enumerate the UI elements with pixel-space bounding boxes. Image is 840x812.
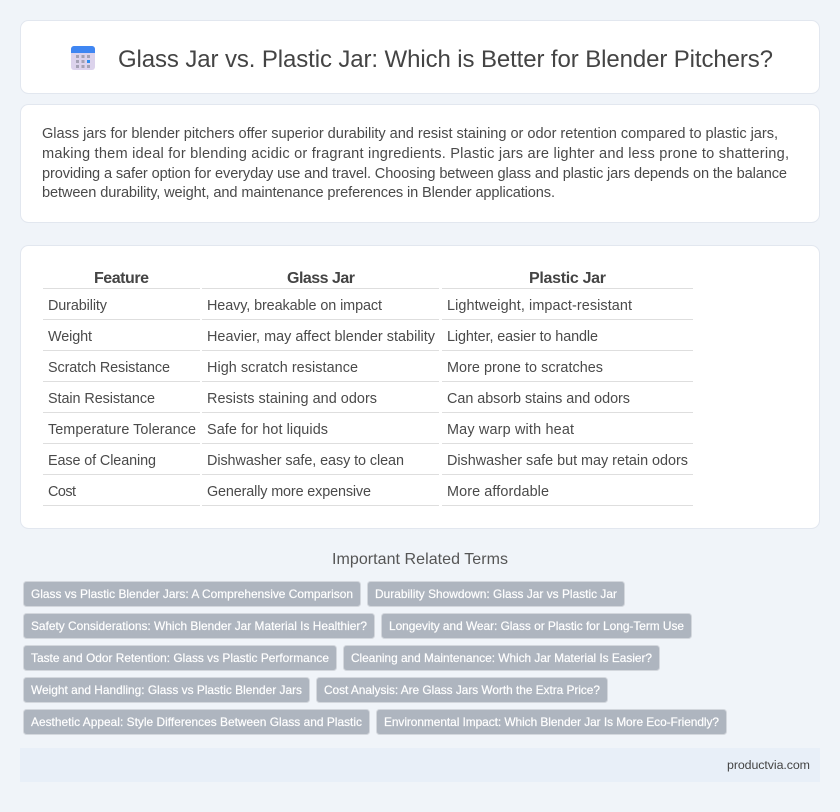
row: durability: Heavy, breakable on impact — [207, 298, 382, 314]
tag: Durability Showdown: Glass Jar vs Plastic Jar — [375, 587, 617, 601]
row: temperature tolerance: May warp with heat — [447, 422, 574, 438]
row: scratch resistance: High scratch resistance — [207, 360, 358, 376]
text block: summary: providing a safer option for everyday use and travel. Choosing between glass and plastic jars depends on the balance — [42, 166, 787, 182]
tag: Glass vs Plastic Blender Jars: A Comprehensive Comparison — [31, 587, 353, 601]
tag: Cost Analysis: Are Glass Jars Worth the Extra Price? — [324, 683, 600, 697]
table header: Plastic Jar — [529, 270, 606, 287]
tag — [376, 710, 726, 734]
row: ease of cleaning — [48, 453, 688, 469]
row: stain resistance: Resists staining and odors — [207, 391, 377, 407]
tag — [24, 646, 336, 670]
row: ease of cleaning: Dishwasher safe, easy to clean — [207, 453, 404, 469]
row: stain resistance: Can absorb stains and odors — [447, 391, 630, 407]
tag: Aesthetic Appeal: Style Differences Between Glass and Plastic — [31, 715, 362, 729]
row: durability — [48, 298, 632, 314]
row: durability: Durability — [48, 298, 108, 314]
row: cost: Generally more expensive — [207, 484, 371, 500]
footer — [20, 748, 820, 782]
row: cost: More affordable — [447, 484, 549, 500]
text block: summary: between durability, weight, and maintenance preferences in Blender applications. — [42, 185, 555, 201]
tag — [368, 582, 624, 606]
table header: Glass Jar — [287, 270, 355, 287]
text block: summary: Glass jars for blender pitchers offer superior durability and resist staining or odor retention compared to plastic jars, — [42, 126, 778, 142]
row: weight: Heavier, may affect blender stability — [207, 329, 436, 345]
tag — [316, 678, 608, 702]
tag: Environmental Impact: Which Blender Jar Is More Eco-Friendly? — [384, 715, 719, 729]
row: ease of cleaning: Dishwasher safe but may retain odors — [447, 453, 688, 469]
row: cost: Cost — [48, 484, 76, 500]
row: durability: Lightweight, impact-resistant — [447, 298, 632, 314]
tag — [382, 614, 692, 638]
title: Glass Jar vs. Plastic Jar: Which is Better for Blender Pitchers? — [118, 46, 773, 73]
row: temperature tolerance — [48, 422, 574, 438]
icon: calendar grid — [71, 46, 95, 70]
tag — [24, 678, 310, 702]
row: weight: Lighter, easier to handle — [447, 329, 598, 345]
tag: Longevity and Wear: Glass or Plastic for Long-Term Use — [389, 619, 684, 633]
row: temperature tolerance: Temperature Tolerance — [48, 422, 196, 438]
row: scratch resistance — [48, 360, 603, 376]
tag — [344, 646, 660, 670]
tag — [24, 710, 370, 734]
row: stain resistance: Stain Resistance — [48, 391, 155, 407]
table header — [94, 270, 606, 287]
row: weight: Weight — [48, 329, 92, 345]
row: scratch resistance: Scratch Resistance — [48, 360, 170, 376]
tag list: related terms — [24, 582, 726, 734]
tag: Taste and Odor Retention: Glass vs Plastic Performance — [31, 651, 329, 665]
footer source: productvia.com — [727, 758, 810, 772]
tag — [24, 582, 360, 606]
row: temperature tolerance: Safe for hot liquids — [207, 422, 328, 438]
row: stain resistance — [48, 391, 630, 407]
panel: comparison table — [20, 246, 820, 528]
row: scratch resistance: More prone to scratches — [447, 360, 603, 376]
tag: Safety Considerations: Which Blender Jar Material Is Healthier? — [31, 619, 367, 633]
tag: Weight and Handling: Glass vs Plastic Blender Jars — [31, 683, 302, 697]
row: weight — [48, 329, 598, 345]
row: cost — [48, 484, 549, 500]
text block: summary: making them ideal for blending acidic or fragrant ingredients. Plastic jars are lighter and less prone to shattering, — [42, 146, 789, 162]
text block: summary — [42, 126, 789, 201]
panel: title card — [20, 20, 820, 94]
table header: Feature — [94, 270, 149, 287]
tag — [24, 614, 374, 638]
row: ease of cleaning: Ease of Cleaning — [48, 453, 156, 469]
heading: related terms: Important Related Terms — [332, 551, 508, 568]
panel: summary card — [20, 104, 820, 222]
tag: Cleaning and Maintenance: Which Jar Material Is Easier? — [351, 651, 652, 665]
